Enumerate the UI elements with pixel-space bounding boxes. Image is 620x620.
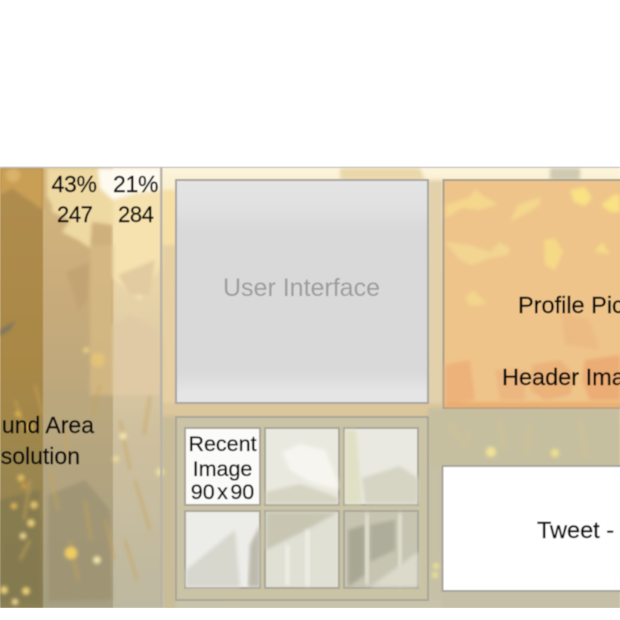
background photo panel	[0, 167, 620, 608]
infographic content	[0, 166, 620, 608]
recent image tile with caption: Image	[193, 457, 252, 481]
column stats	[52, 171, 158, 227]
panel: user interface: User Interface	[223, 274, 380, 302]
thumbnail 5	[265, 511, 339, 588]
background area label	[1, 412, 94, 469]
thumbnail 6	[344, 511, 418, 588]
stat: 247: 247	[57, 202, 93, 227]
background area label: solution	[1, 443, 80, 469]
panel: tweet: Tweet -	[537, 517, 614, 543]
stat: 21%: 21%	[113, 171, 158, 197]
left panel: background area columns	[0, 166, 620, 608]
panel: profile and header image	[444, 180, 620, 408]
panel: user interface	[176, 180, 428, 403]
panel: recent images	[176, 417, 428, 600]
thumbnail 4	[185, 511, 260, 588]
thumbnail 3	[344, 428, 418, 505]
recent image tile with caption: 90 x 90	[191, 480, 254, 504]
background area label: und Area	[2, 412, 94, 438]
recent image tile with caption	[185, 428, 260, 505]
stat: 284: 284	[118, 202, 154, 227]
panel: tweet	[442, 466, 620, 591]
stat: 43%: 43%	[52, 171, 97, 197]
thumbnail 2	[265, 428, 339, 505]
recent image tile with caption: Recent	[188, 432, 257, 456]
